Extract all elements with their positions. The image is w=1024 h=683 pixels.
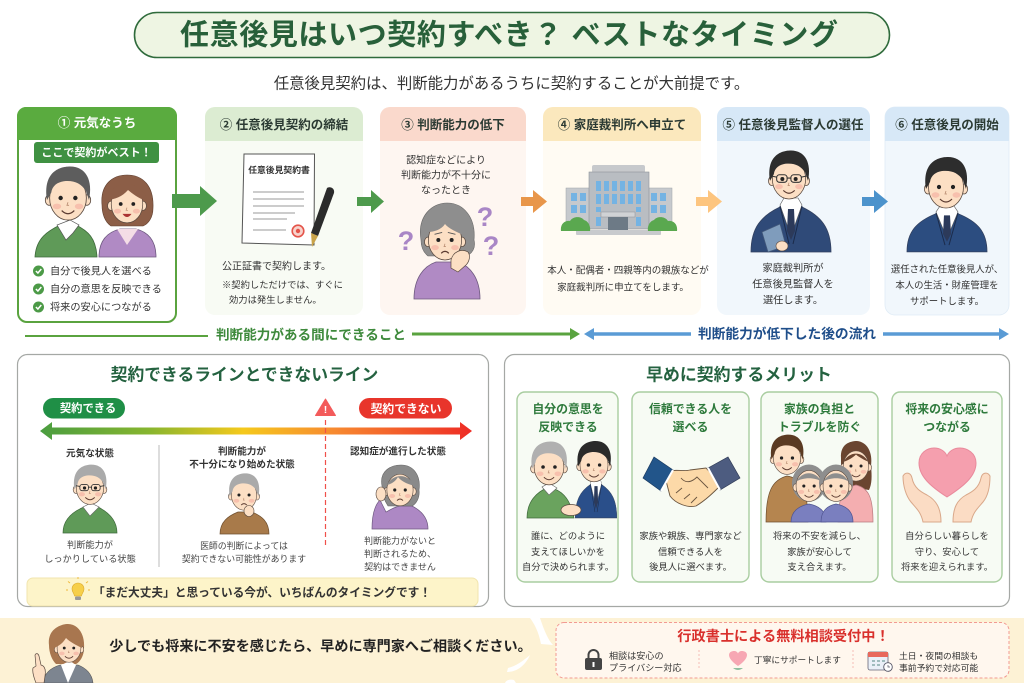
illustration: supervisor with glasses and folder bbox=[751, 150, 831, 252]
merit card 1: 支えてほしいかを bbox=[531, 546, 605, 557]
icon: calendar with clock bbox=[868, 652, 892, 671]
arrow: step 2 to 3 bbox=[357, 190, 384, 213]
merit card 2: 後見人に選べます。 bbox=[649, 561, 732, 572]
description text: 家庭裁判所に申立てをします。 bbox=[557, 281, 689, 293]
illustration: family bbox=[766, 435, 873, 522]
state 3: advanced dementia: 契約はできません bbox=[364, 561, 436, 572]
state 3: advanced dementia: 判断されるため、 bbox=[364, 548, 436, 559]
merit card 3 bbox=[761, 392, 878, 582]
pill: cannot contract bbox=[359, 398, 452, 418]
step 1 card: 元気なうち bbox=[17, 107, 177, 322]
illustration: client with advisor bbox=[527, 441, 617, 518]
arrow: step 5 to 6 bbox=[862, 190, 888, 213]
state 2: starting to decline bbox=[182, 445, 306, 564]
contract note: ※契約しただけでは、すぐに bbox=[222, 279, 343, 290]
support text: 丁寧にサポートします bbox=[754, 654, 841, 665]
merit card 2 bbox=[632, 392, 749, 582]
warning icon bbox=[316, 399, 336, 416]
illustration: confused woman with question marks: ? bbox=[398, 226, 414, 256]
state 2: starting to decline: 不十分になり始めた状態 bbox=[189, 458, 295, 470]
state 2: starting to decline: 医師の判断によっては bbox=[200, 540, 288, 551]
description text: 家庭裁判所が bbox=[762, 261, 824, 274]
badge: best timing: ここで契約がベスト！ bbox=[41, 145, 152, 159]
contract note: 公正証書で契約します。 bbox=[222, 259, 331, 272]
illustration: confused woman with question marks bbox=[398, 202, 499, 299]
title banner: 任意後見はいつ契約すべき？ ベストなタイミング bbox=[180, 18, 838, 51]
description text: 任意後見監督人を bbox=[752, 277, 834, 290]
merit card 1: 反映できる bbox=[538, 420, 598, 434]
description text bbox=[752, 261, 834, 306]
benefits checklist: 将来の安心につながる bbox=[50, 300, 152, 313]
contract note: 効力は発生しません。 bbox=[229, 294, 322, 305]
merit card 2: 信頼できる人を bbox=[658, 546, 723, 557]
callout: it is the best timing: 「まだ大丈夫」と思っている今が、いちばんのタイミングです！ bbox=[93, 585, 431, 599]
arrow: step 1 to 2 bbox=[172, 186, 217, 216]
description text: 本人の生活・財産管理を bbox=[895, 279, 999, 290]
illustration: handshake bbox=[643, 457, 740, 507]
merit card 4: 将来の安心感に bbox=[905, 402, 989, 416]
privacy text bbox=[609, 650, 682, 673]
illustration: guardian in suit bbox=[907, 157, 987, 252]
step 6 card: 任意後見の開始: ⑥ 任意後見の開始 bbox=[895, 117, 999, 132]
illustration: heart held by hands bbox=[903, 448, 990, 522]
illustration: contract document and pen bbox=[242, 154, 334, 247]
merit card 4: 守り、安心して bbox=[915, 546, 979, 557]
pill: can contract bbox=[43, 398, 125, 418]
benefits checklist: 自分の意思を反映できる bbox=[50, 282, 162, 295]
merit card 2: 家族や親族、専門家など bbox=[639, 530, 742, 541]
state 1: healthy: しっかりしている状態 bbox=[44, 553, 136, 564]
merit card 4: つながる bbox=[923, 420, 971, 434]
step 1 card: 元気なうち: ① 元気なうち bbox=[58, 115, 136, 130]
step 2 card: 任意後見契約の締結: ② 任意後見契約の締結 bbox=[220, 117, 349, 132]
merit card 3: 支え合えます。 bbox=[787, 561, 852, 572]
description text bbox=[401, 153, 491, 196]
illustration: contract document and pen: 任意後見契約書 bbox=[248, 164, 310, 175]
gradient arrow bbox=[40, 422, 472, 440]
step 5 card: 任意後見監督人の選任: ⑤ 任意後見監督人の選任 bbox=[723, 117, 864, 132]
merit card 3: 家族が安心して bbox=[787, 546, 852, 557]
weekend text bbox=[899, 650, 978, 673]
step 5 card: 任意後見監督人の選任 bbox=[717, 107, 870, 315]
merit card 4: 自分らしい暮らしを bbox=[905, 530, 989, 541]
state 3: advanced dementia bbox=[350, 445, 446, 572]
timeline: after capacity declines bbox=[584, 325, 1009, 341]
footer banner bbox=[0, 618, 1024, 683]
icon: light bulb bbox=[66, 577, 90, 600]
icon: heart bbox=[729, 651, 747, 670]
weekend text: 土日・夜間の相談も bbox=[899, 650, 978, 661]
state 2: starting to decline: 判断能力が bbox=[218, 445, 266, 457]
description text: 選任された任意後見人が、 bbox=[891, 263, 1003, 274]
illustration: confused woman with question marks: ? bbox=[477, 202, 493, 232]
benefits checklist: 自分で後見人を選べる bbox=[50, 264, 152, 277]
state 1: healthy bbox=[44, 447, 136, 564]
title banner bbox=[134, 12, 890, 58]
description text: サポートします。 bbox=[910, 295, 984, 306]
privacy text: プライバシー対応 bbox=[609, 662, 682, 673]
call to action text: 少しでも将来に不安を感じたら、早めに専門家へご相談ください。 bbox=[109, 638, 532, 654]
state 1: healthy: 判断能力が bbox=[67, 539, 113, 550]
step 4 card: 家庭裁判所へ申立て: ④ 家庭裁判所へ申立て bbox=[558, 117, 686, 132]
box: free consultation bbox=[556, 622, 1009, 678]
contract note bbox=[222, 259, 343, 305]
illustration: confused woman with question marks: ? bbox=[483, 231, 499, 261]
merit card 3: トラブルを防ぐ bbox=[778, 420, 861, 434]
timeline: while capacity remains bbox=[25, 326, 580, 342]
description text: なったとき bbox=[421, 184, 471, 196]
benefits checklist bbox=[33, 264, 162, 313]
description text: 本人・配偶者・四親等内の親族などが bbox=[547, 264, 709, 276]
state 1: healthy: 元気な状態 bbox=[66, 447, 114, 459]
merit card 2: 選べる bbox=[673, 420, 708, 434]
merit card 2: 信頼できる人を bbox=[649, 402, 732, 416]
description text: 判断能力が不十分に bbox=[401, 168, 491, 181]
step 2 card: 任意後見契約の締結 bbox=[205, 107, 363, 315]
timeline: after capacity declines: 判断能力が低下した後の流れ bbox=[698, 325, 876, 341]
merit card 1: 自分で決められます。 bbox=[522, 561, 614, 572]
illustration: courthouse building bbox=[561, 165, 677, 235]
pill: can contract: 契約できる bbox=[60, 401, 116, 415]
icon: lock bbox=[585, 650, 602, 670]
arrow: step 3 to 4 bbox=[521, 190, 547, 213]
warning icon: ! bbox=[324, 404, 327, 416]
merit card 3: 家族の負担と bbox=[784, 402, 855, 416]
merit card 4 bbox=[892, 392, 1002, 582]
heading: 契約できるラインとできないライン bbox=[111, 365, 378, 384]
step 6 card: 任意後見の開始 bbox=[885, 107, 1009, 315]
panel: contract line bbox=[18, 354, 488, 606]
step 3 card: 判断能力の低下: ③ 判断能力の低下 bbox=[401, 117, 505, 132]
privacy text: 相談は安心の bbox=[609, 650, 664, 661]
box: free consultation: 行政書士による無料相談受付中！ bbox=[677, 628, 890, 645]
state 3: advanced dementia: 認知症が進行した状態 bbox=[350, 445, 446, 457]
step 4 card: 家庭裁判所へ申立て bbox=[543, 107, 709, 315]
callout: it is the best timing bbox=[27, 577, 478, 606]
illustration: elderly couple bbox=[35, 166, 156, 257]
merit card 3: 将来の不安を減らし、 bbox=[773, 530, 866, 541]
pill: cannot contract: 契約できない bbox=[371, 402, 442, 416]
state 3: advanced dementia: 判断能力がないと bbox=[364, 535, 436, 546]
arrow: step 4 to 5 bbox=[696, 190, 722, 213]
illustration: advisor woman pointing bbox=[33, 624, 93, 683]
heading: 早めに契約するメリット bbox=[646, 365, 832, 384]
step 3 card: 判断能力の低下 bbox=[380, 107, 526, 315]
description text bbox=[547, 264, 709, 293]
merit card 1: 自分の意思を bbox=[532, 402, 604, 416]
weekend text: 事前予約で対応可能 bbox=[899, 662, 978, 673]
description text: 選任します。 bbox=[763, 293, 823, 306]
subtitle: 任意後見契約は、判断能力があるうちに契約することが大前提です。 bbox=[274, 74, 749, 92]
merit card 1: 誰に、どのように bbox=[531, 530, 605, 541]
state 2: starting to decline: 契約できない可能性があります bbox=[182, 553, 306, 564]
badge: best timing bbox=[34, 142, 159, 163]
panel: merits of contracting early bbox=[504, 354, 1010, 606]
description text bbox=[891, 263, 1003, 306]
merit card 1 bbox=[517, 392, 618, 582]
merit card 4: 将来を迎えられます。 bbox=[901, 561, 993, 572]
timeline: while capacity remains: 判断能力がある間にできること bbox=[216, 326, 406, 342]
description text: 認知症などにより bbox=[406, 153, 486, 166]
